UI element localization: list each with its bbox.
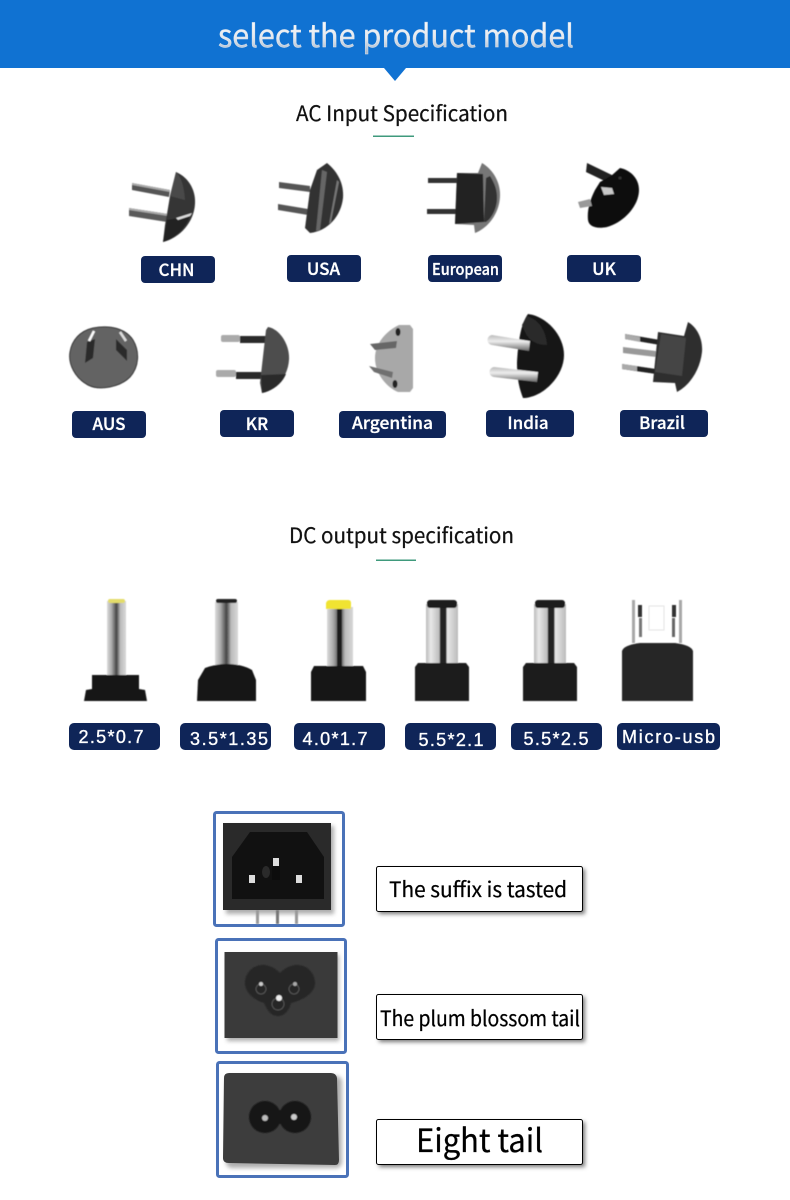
label: Argentina: Argentina — [352, 409, 433, 434]
icon: AUS plug — [70, 327, 138, 388]
heading: DC output: DC output specification — [289, 520, 514, 550]
icon: UK plug — [578, 163, 639, 228]
callout: The suffix is tasted: The suffix is tasted — [389, 874, 567, 904]
label: Argentina — [339, 409, 446, 438]
label: CHN — [141, 256, 215, 283]
label: UK: UK — [592, 255, 617, 280]
icon: India plug — [488, 314, 564, 398]
label: 3.5*1.35 — [180, 723, 271, 750]
callout: Eight tail: Eight tail — [416, 1116, 543, 1162]
label: USA: USA — [307, 255, 341, 280]
callout: The plum blossom tail — [376, 994, 585, 1042]
label: 5.5*2.1 — [405, 723, 496, 750]
label: 5.5*2.5 — [511, 723, 602, 750]
label: 3.5*1.35: 3.5*1.35 — [190, 729, 268, 749]
header banner — [0, 0, 790, 81]
icon: European plug — [427, 163, 500, 233]
label: CHN: CHN — [158, 256, 195, 281]
callout: Eight tail — [376, 1116, 585, 1167]
label: Brazil: Brazil — [639, 409, 685, 434]
label: India: India — [507, 409, 549, 434]
label: 5.5*2.1: 5.5*2.1 — [418, 730, 484, 750]
callout: The plum blossom tail: The plum blossom tail — [380, 1003, 580, 1033]
icon: Micro-usb connector — [622, 600, 693, 701]
panel: eight tail socket photo — [218, 1062, 348, 1176]
icon: 5.5*2.5 connector — [523, 600, 577, 701]
icon: 4.0*1.7 connector — [311, 600, 366, 701]
icon: 5.5*2.1 connector — [415, 600, 469, 701]
panel: plum blossom socket photo — [216, 940, 346, 1052]
label: UK — [567, 255, 641, 282]
icon: pins — [256, 910, 298, 924]
label: India — [486, 409, 574, 437]
heading: AC input: AC Input Specification — [296, 98, 508, 128]
icon: Brazil plug — [622, 322, 702, 392]
icon: figure-8 socket — [249, 1101, 311, 1133]
icon: Argentina plug — [369, 325, 413, 392]
label: 4.0*1.7 — [294, 723, 385, 750]
label: AUS — [72, 410, 146, 438]
callout: The suffix is tasted — [376, 866, 585, 914]
icon: 2.5*0.7 connector — [84, 599, 147, 701]
icon: USA plug — [278, 163, 343, 233]
icon: KR plug — [216, 327, 289, 393]
icon: CHN plug — [129, 172, 195, 242]
label: European: European — [432, 256, 499, 280]
label: KR: KR — [246, 410, 268, 435]
label: 5.5*2.5: 5.5*2.5 — [524, 729, 588, 749]
label: AUS: AUS — [93, 410, 125, 435]
label: 2.5*0.7: 2.5*0.7 — [78, 727, 144, 747]
label: 4.0*1.7: 4.0*1.7 — [302, 729, 368, 749]
icon: clover socket — [245, 965, 315, 1016]
icon: 3.5*1.35 connector — [197, 599, 256, 701]
label: USA — [287, 255, 361, 282]
title: select the product model — [218, 11, 574, 56]
label: KR — [220, 410, 294, 437]
panel: suffix socket photo — [214, 812, 344, 926]
label: Brazil — [620, 409, 708, 437]
label: Micro-usb: Micro-usb — [622, 727, 715, 747]
label: Micro-usb — [617, 723, 720, 750]
label: 2.5*0.7 — [69, 723, 160, 750]
